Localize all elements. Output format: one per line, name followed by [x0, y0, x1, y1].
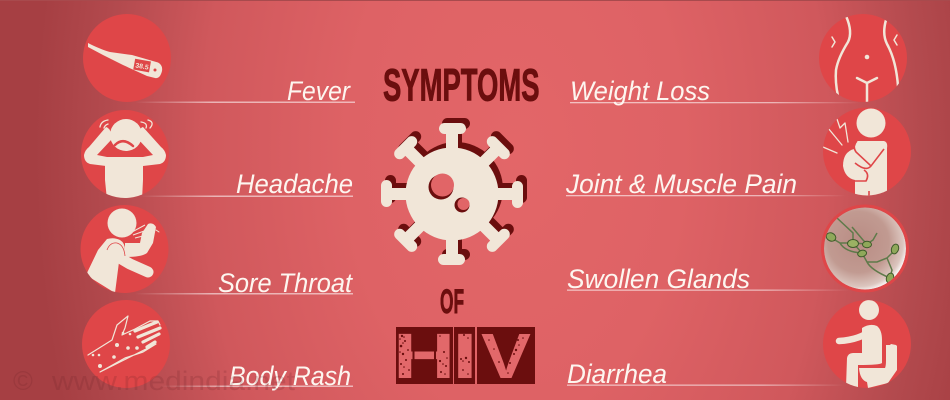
label line	[567, 290, 850, 291]
virus body	[381, 123, 523, 265]
icon: person with throat pain	[80, 205, 168, 293]
label line	[570, 102, 860, 103]
symptom: weight loss	[570, 14, 907, 106]
symptom: fever	[83, 14, 355, 106]
label: Body Rash: Body Rash	[229, 361, 351, 391]
label line	[135, 102, 355, 103]
HIV letters	[393, 320, 531, 392]
label: Fever: Fever	[287, 76, 351, 106]
virus shadow	[385, 118, 527, 260]
symptom: swollen glands	[567, 206, 908, 294]
heading: OF: OF	[440, 283, 464, 321]
HIV letters: H	[393, 321, 455, 392]
watermark: www.medindia.net	[51, 366, 296, 396]
label line	[566, 195, 846, 196]
label line	[135, 293, 353, 294]
label line	[140, 196, 353, 197]
symptom: body rash	[82, 300, 353, 391]
label: Swollen Glands: Swollen Glands	[567, 264, 750, 294]
virus holes	[428, 174, 470, 212]
icon: swollen lymph glands	[822, 206, 908, 291]
icon: person holding head	[81, 110, 169, 200]
HIV dark blocks	[396, 327, 535, 384]
heading: HIV	[393, 320, 535, 392]
label: Sore Throat: Sore Throat	[218, 268, 353, 298]
HIV letters: V	[481, 320, 531, 392]
symptom: sore throat	[80, 205, 353, 298]
icon: person on toilet	[823, 300, 911, 388]
icon: slim waist	[819, 14, 907, 104]
icon: virus	[381, 118, 527, 265]
label line	[160, 386, 353, 387]
icon: thermometer: 38.5	[135, 62, 149, 72]
HIV letters: I	[452, 320, 478, 392]
symptom: joint and muscle pain	[565, 108, 911, 199]
heading: SYMPTOMS: SYMPTOMS	[383, 59, 540, 110]
label: Headache: Headache	[236, 169, 353, 199]
label line	[567, 384, 845, 386]
watermark: ©	[13, 366, 33, 396]
icon: thermometer	[83, 14, 171, 102]
symptom: diarrhea	[567, 300, 911, 389]
top edge	[0, 0, 950, 1]
icon: person holding shoulder	[823, 108, 911, 196]
icon: hand with rash	[82, 300, 170, 388]
symptom: headache	[81, 110, 353, 200]
label: Weight Loss: Weight Loss	[570, 76, 710, 106]
label: Diarrhea: Diarrhea	[567, 359, 667, 389]
HIV distressed speckles	[399, 334, 524, 375]
label: Joint & Muscle Pain: Joint & Muscle Pain	[565, 169, 797, 199]
